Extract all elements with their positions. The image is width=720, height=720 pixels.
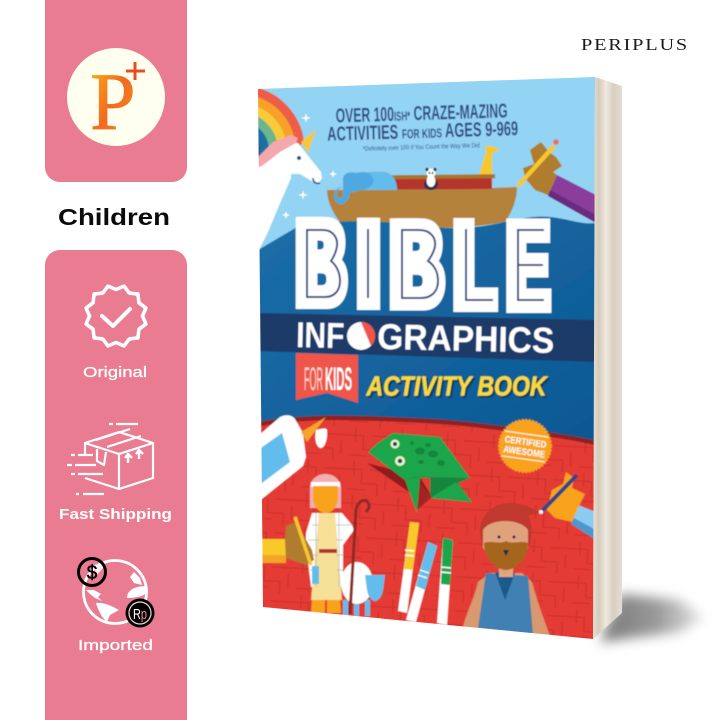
- bible title: B: [294, 198, 342, 330]
- infographics title: INF: [296, 314, 345, 356]
- bible title: [294, 216, 552, 314]
- infographics title: [297, 321, 554, 354]
- activity book title: ACTIVITY BOOK: [368, 372, 550, 404]
- bible title: E: [505, 198, 545, 334]
- markers: [398, 522, 453, 625]
- logo plus sign: [126, 62, 145, 80]
- giraffe: [479, 146, 500, 175]
- bible title: E: [508, 198, 548, 334]
- label: fast shipping: Fast Shipping: [59, 506, 172, 523]
- arm and hand with pencil: [518, 139, 596, 223]
- rainbow: [258, 88, 304, 158]
- icon: dollar coin: $: [87, 563, 98, 584]
- unicorn: [256, 129, 322, 250]
- pie chart letter: [347, 322, 375, 350]
- glue bottle: [258, 415, 327, 502]
- for kids ribbon: [296, 353, 358, 403]
- bearded man: [462, 503, 550, 636]
- bible title: B: [300, 198, 348, 330]
- book shadow: [600, 594, 704, 642]
- maze bricks: [258, 417, 596, 645]
- icon: rupiah coin: Rp: [133, 606, 147, 623]
- book cover: E: [511, 198, 551, 334]
- book spine: [593, 77, 622, 639]
- icon: imported globe: [78, 558, 154, 628]
- certified awesome seal: CERTIFIED: [504, 434, 547, 451]
- bible title: B: [391, 199, 442, 331]
- icon: original badge: [86, 286, 146, 346]
- bible title: I: [358, 198, 382, 330]
- bible title: L: [455, 196, 494, 332]
- book cover: [258, 77, 595, 639]
- activity book title: ACTIVITY BOOK: [366, 370, 548, 402]
- origami frog: [367, 433, 472, 513]
- sea: [258, 217, 596, 450]
- book cover: KIDS: [325, 361, 352, 397]
- bible title: I: [355, 198, 379, 330]
- cover tagline: *Definitely over 100 if You Count the Way We Did: [363, 142, 480, 153]
- sparkles: [282, 113, 337, 219]
- bible title: B: [388, 199, 439, 331]
- certified awesome seal: AWESOME: [503, 444, 546, 461]
- bible title: B: [394, 199, 445, 331]
- label: original: Original: [83, 364, 147, 381]
- ark: [327, 174, 517, 228]
- left hand with pencil: [258, 517, 314, 565]
- bible title: L: [458, 196, 497, 332]
- logo letter P: P: [90, 56, 136, 147]
- bible title: L: [452, 196, 491, 332]
- label: imported: Imported: [78, 637, 153, 654]
- cover tagline: OVER 100ISH* CRAZE-MAZING: [335, 100, 508, 127]
- title band: [258, 313, 596, 362]
- cover tagline: [326, 100, 519, 154]
- brand wordmark: PERIPLUS: [581, 35, 689, 54]
- heading: category: Children: [58, 204, 170, 230]
- bible title: B: [297, 198, 345, 330]
- activity book title: [364, 375, 550, 398]
- cover sky: [260, 77, 595, 250]
- infographics title: GRAPHICS: [377, 316, 555, 361]
- sheep: [341, 562, 385, 616]
- infographics title: O: [352, 315, 381, 357]
- panel: benefits: [45, 250, 187, 720]
- certified awesome seal: [499, 420, 551, 472]
- for kids ribbon: FOR: [304, 361, 323, 397]
- panda: [424, 168, 438, 190]
- shepherd figure: [306, 474, 354, 613]
- icon: fast shipping box: [67, 424, 153, 494]
- cover tagline: ACTIVITIES FOR KIDS AGES 9-969: [327, 118, 518, 146]
- elephant: [334, 172, 397, 204]
- shepherd staff: [350, 500, 369, 614]
- panel: brand logo: [45, 0, 187, 182]
- right hand with pen: [539, 472, 596, 540]
